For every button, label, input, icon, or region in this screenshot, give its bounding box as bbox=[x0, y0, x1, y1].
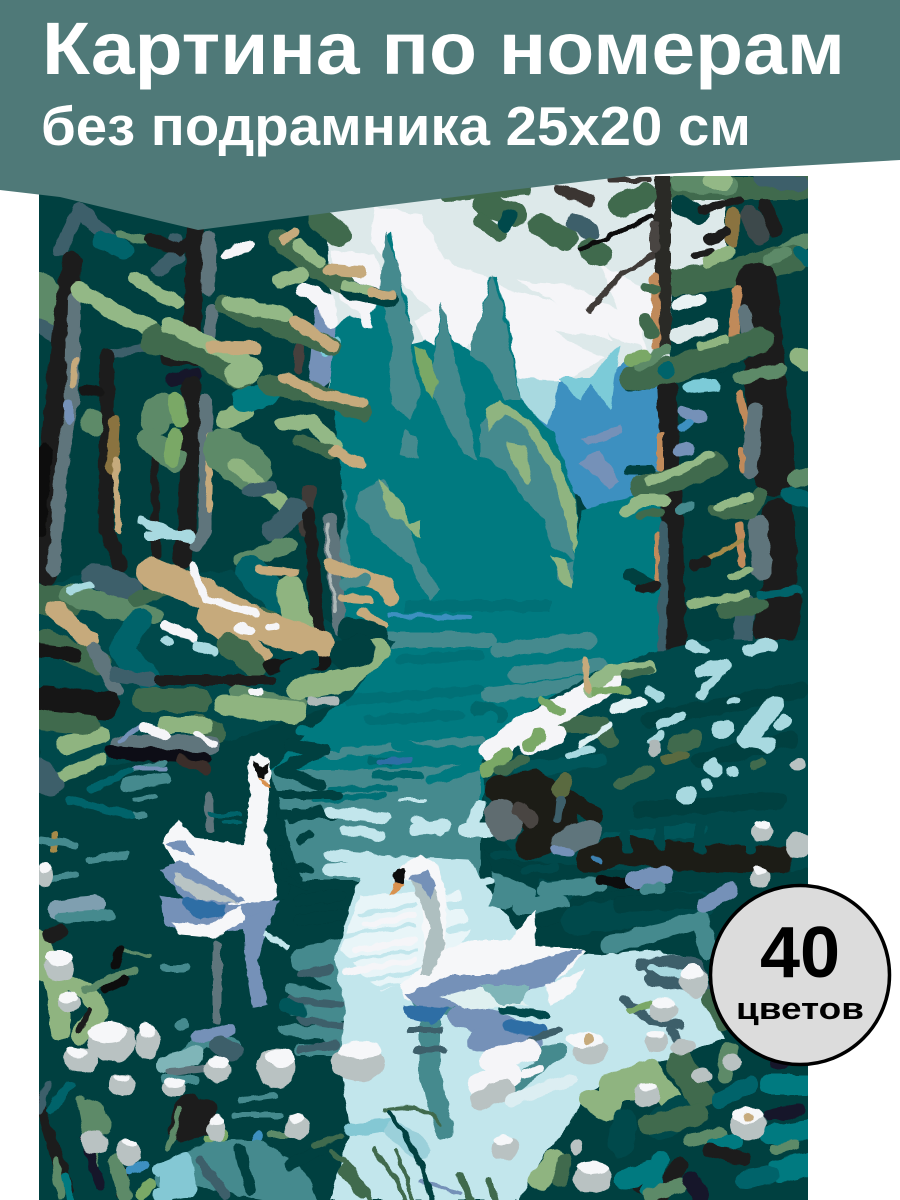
distant mountain bbox=[516, 346, 660, 509]
foreground left plants and rocks bbox=[39, 932, 360, 1200]
left lake reflections bbox=[40, 770, 240, 1025]
badge number: 40 bbox=[760, 913, 840, 993]
foreground right bush bbox=[520, 1000, 808, 1200]
right bank with white flowers bbox=[483, 640, 815, 905]
water with ripples bbox=[270, 615, 725, 1200]
sky bbox=[327, 176, 727, 431]
grass blades bbox=[330, 1107, 495, 1200]
subtitle: без подрамника 25х20 см bbox=[41, 95, 751, 157]
white flowers bbox=[37, 758, 810, 1193]
right forest bbox=[441, 176, 808, 652]
left bank with bushes bbox=[39, 515, 395, 785]
swan: right bbox=[389, 855, 585, 1025]
title: Картина по номерам bbox=[42, 7, 845, 90]
badge label: цветов bbox=[736, 991, 864, 1026]
far forest bbox=[329, 230, 662, 622]
panel: painting of swans on a forest lake bbox=[20, 160, 830, 1200]
left forest bbox=[39, 200, 392, 640]
badge: 40 colours bbox=[710, 886, 890, 1064]
banner shape bbox=[0, 0, 900, 230]
banner bbox=[0, 0, 900, 230]
swan: left bbox=[160, 752, 290, 1008]
